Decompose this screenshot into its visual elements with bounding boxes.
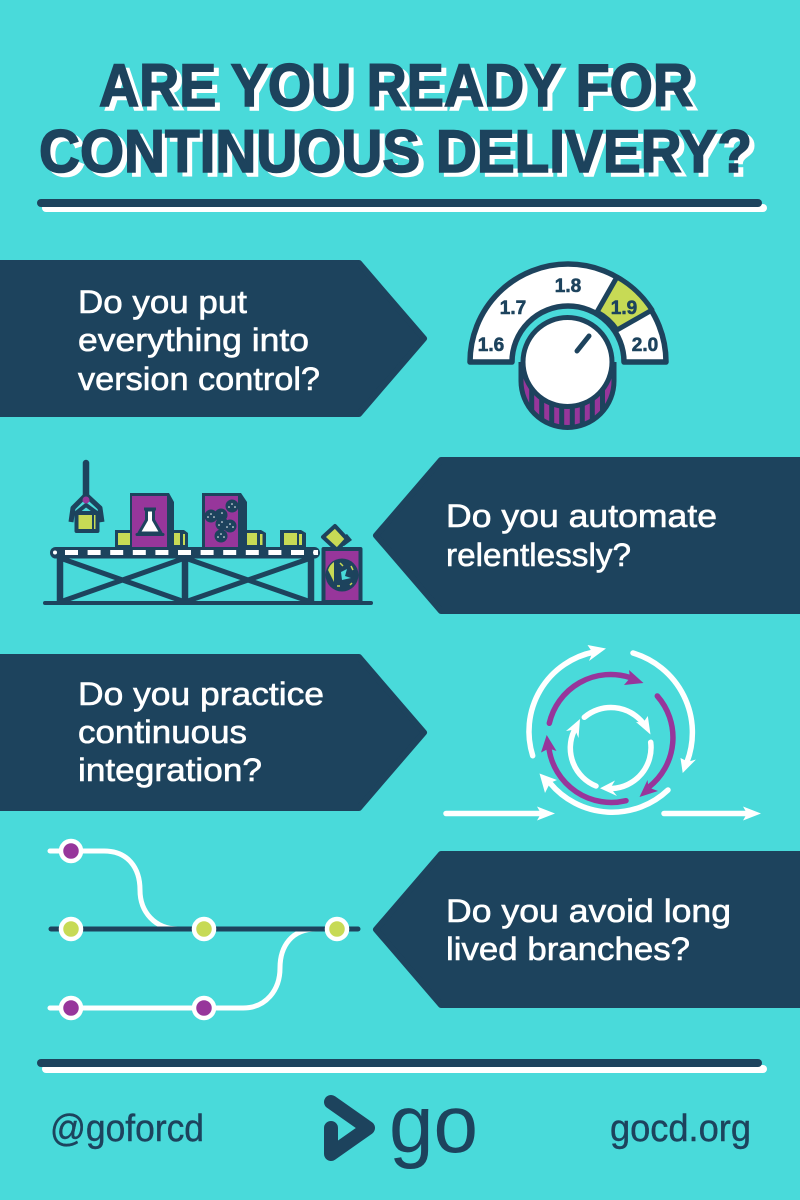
icon: version dial: 2.0 xyxy=(632,335,658,356)
footer rule xyxy=(37,1059,767,1073)
panel: version control banner xyxy=(0,263,424,414)
box with flask xyxy=(130,493,174,548)
frame xyxy=(45,558,371,603)
icon: branch diagram xyxy=(50,841,358,1018)
title: ARE YOU READY FOR xyxy=(104,56,698,123)
logo: go xyxy=(389,1079,478,1170)
title xyxy=(39,52,757,189)
belt xyxy=(50,547,320,558)
twitter handle: @goforcd xyxy=(50,1108,204,1150)
panel: version control banner: Do you put xyxy=(78,284,247,320)
icon: version dial: 1.8 xyxy=(555,276,581,297)
title rule xyxy=(37,199,767,212)
bin with globe xyxy=(323,526,360,602)
panel: continuous integration banner: Do you practice xyxy=(78,676,324,712)
icon: version dial: 1.6 xyxy=(478,335,504,356)
icon: version dial: 1.9 xyxy=(611,298,637,319)
panel: continuous integration banner xyxy=(0,657,424,808)
panel: automate banner: relentlessly? xyxy=(446,537,631,573)
title: CONTINUOUS DELIVERY? xyxy=(39,118,752,185)
panel: automate banner xyxy=(376,460,800,611)
panel: continuous integration banner: integration? xyxy=(78,752,262,788)
box with dots xyxy=(202,493,247,548)
panel: long lived branches banner xyxy=(376,854,800,1005)
icon: version dial xyxy=(470,264,666,430)
panel: version control banner: everything into xyxy=(78,322,309,358)
crane xyxy=(71,463,102,531)
icon: version dial: 1.7 xyxy=(500,298,526,319)
panel: continuous integration banner: continuous xyxy=(78,714,247,750)
title: CONTINUOUS DELIVERY? xyxy=(44,122,757,189)
panel: long lived branches banner: Do you avoid long xyxy=(446,893,731,929)
website: gocd.org xyxy=(610,1108,751,1150)
icon: integration cycle arrows xyxy=(446,645,761,820)
panel: version control banner: version control? xyxy=(78,361,320,397)
panel: long lived branches banner: lived branches? xyxy=(446,931,690,967)
logo xyxy=(331,1079,478,1170)
title: ARE YOU READY FOR xyxy=(99,52,693,119)
icon: conveyor belt xyxy=(45,463,371,603)
panel: automate banner: Do you automate xyxy=(446,498,717,534)
small boxes xyxy=(115,530,306,548)
